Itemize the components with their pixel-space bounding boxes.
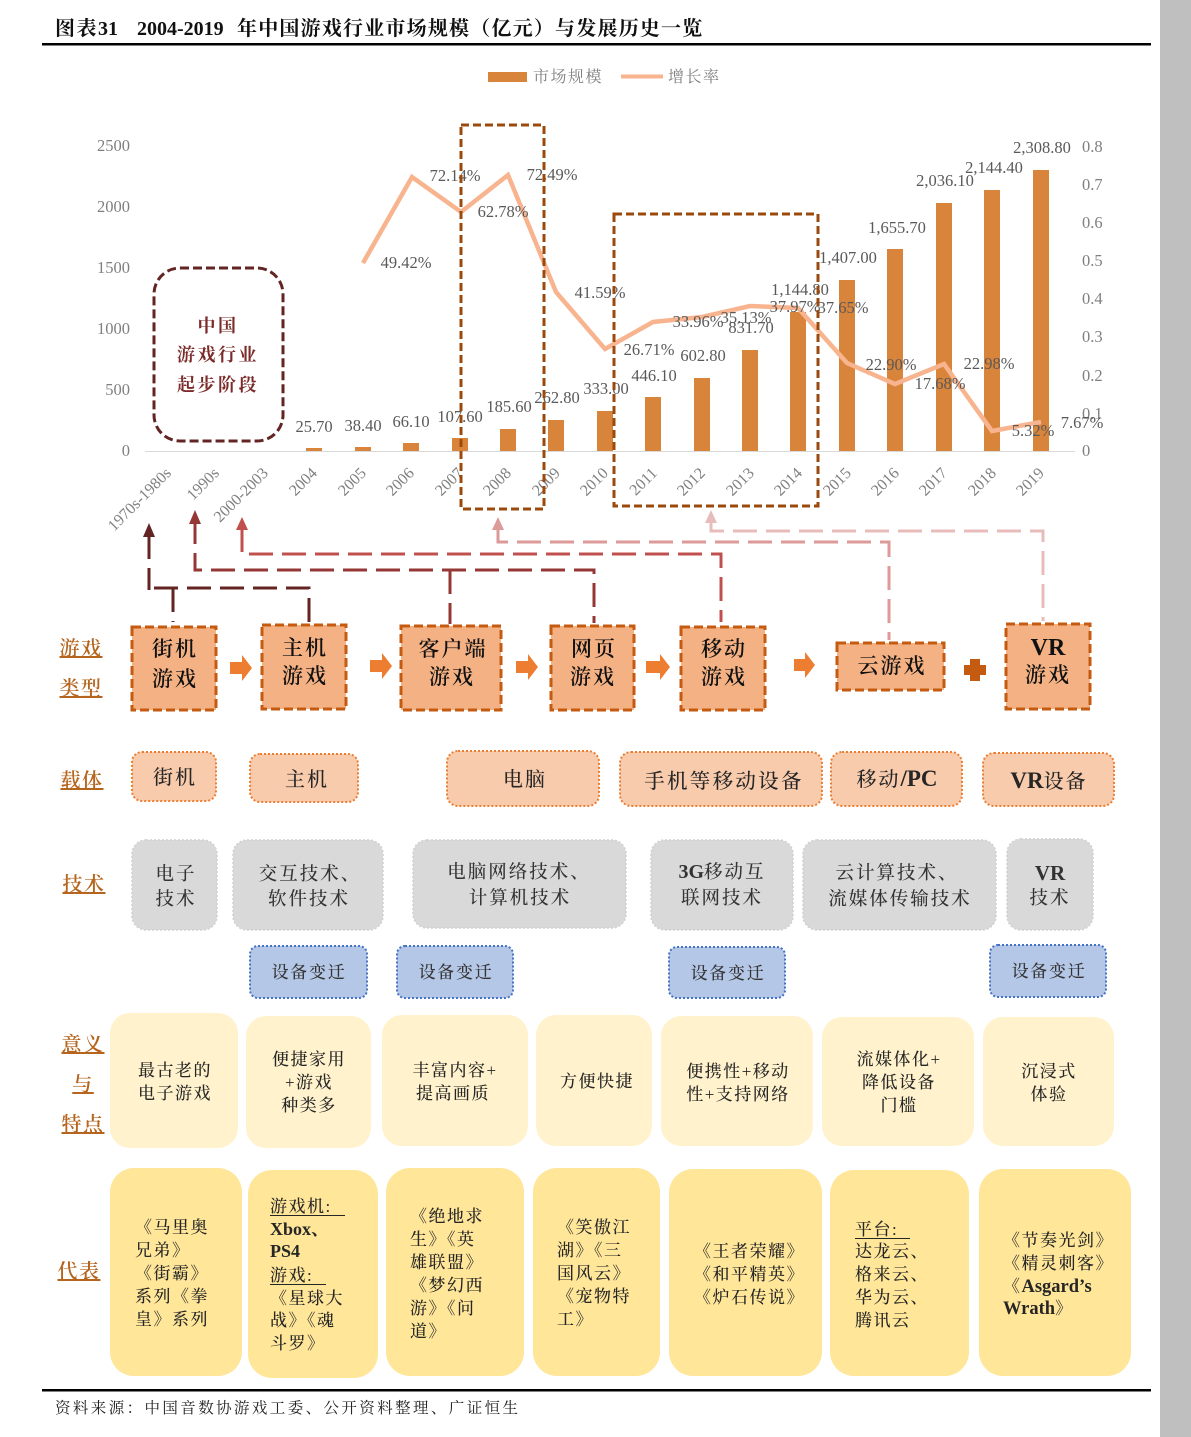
device change tag 4: 设备变迁 (1012, 962, 1086, 981)
line chart: growth rate (363, 175, 1041, 431)
highlight box: 2008 (461, 125, 544, 509)
representatives: VR: Wrath》 (1003, 1299, 1074, 1319)
representatives: web: 国风云》 (557, 1264, 631, 1283)
left y axis: 2500 (97, 136, 130, 155)
row label: meaning and features: 特点 (62, 1113, 104, 1136)
arrow (794, 652, 815, 678)
market size data labels: 333.00 (583, 379, 629, 398)
representatives: console: 战》《魂 (270, 1311, 336, 1330)
left y axis: 2000 (97, 197, 130, 216)
growth rate data labels: 35.13% (721, 308, 772, 327)
tech: 3G mobile internet: 联网技术 (681, 888, 763, 909)
representatives: console: 游戏: (270, 1266, 313, 1285)
growth rate data labels: 72.49% (527, 165, 578, 184)
bottom rule (42, 1389, 1151, 1392)
device change tag 1 (250, 946, 367, 998)
feature: convenient: 方便快捷 (560, 1072, 634, 1091)
x axis year labels: 2011 (627, 465, 661, 499)
callout: early stage: 起步阶段 (177, 374, 259, 395)
representatives: web (533, 1168, 660, 1376)
tech: electronic: 电子 (155, 864, 197, 885)
device change tag 3: 设备变迁 (691, 964, 765, 983)
type box: cloud: 云游戏 (858, 654, 926, 678)
carrier: mobile/PC: 移动/PC (856, 766, 938, 791)
carrier: mobile devices: 手机等移动设备 (644, 770, 804, 793)
representatives: web: 《笑傲江 (557, 1218, 631, 1237)
type box: arcade (132, 627, 216, 710)
right y axis: 0.3 (1082, 327, 1103, 346)
feature: home convenience: 种类多 (281, 1096, 337, 1115)
representatives: arcade (110, 1168, 242, 1376)
x axis year labels: 2016 (868, 465, 903, 499)
x axis year labels: 2004 (286, 465, 321, 499)
x axis year labels: 2007 (432, 465, 467, 499)
tech: VR (1007, 839, 1093, 930)
x axis year labels (105, 465, 1048, 535)
growth rate data labels: 41.59% (575, 283, 626, 302)
source note: 资料来源：中国音数协游戏工委、公开资料整理、广证恒生 (55, 1398, 520, 1417)
device change tag 2: 设备变迁 (419, 963, 493, 982)
tech: PC network: 计算机技术 (469, 888, 571, 909)
x axis year labels: 2005 (335, 465, 370, 499)
feature: rich content (382, 1015, 528, 1146)
legend: 增长率 (668, 68, 721, 86)
growth rate data labels: 22.90% (866, 355, 917, 374)
representatives: console: Xbox、 (270, 1219, 329, 1239)
left y axis: 0 (122, 441, 130, 460)
representatives: console: 斗罗》 (270, 1334, 326, 1353)
baseline (145, 451, 1075, 452)
left y axis: 1000 (97, 319, 130, 338)
representatives: VR: 《Asgard’s (1003, 1277, 1092, 1297)
carrier: VR devices (983, 753, 1114, 806)
representatives: client: 生》《英 (410, 1230, 476, 1249)
right grey margin band (1160, 0, 1191, 1437)
representatives: client: 道》 (410, 1322, 447, 1341)
x axis year labels: 2014 (771, 465, 806, 499)
carrier: PC: 电脑 (503, 768, 547, 791)
carrier: mobile/PC (831, 752, 962, 806)
type box: cloud (837, 643, 944, 690)
x axis year labels: 2019 (1013, 465, 1048, 499)
representatives: mobile (669, 1169, 822, 1376)
carrier: arcade: 街机 (153, 766, 197, 789)
representatives: VR: 《精灵刺客》 (1003, 1254, 1114, 1273)
representatives: mobile: 《和平精英》 (694, 1265, 805, 1284)
representatives: arcade: 《街霸》 (135, 1264, 209, 1283)
tech: cloud, streaming (803, 840, 996, 930)
growth rate data labels: 37.97% (770, 297, 821, 316)
representatives: cloud: 华为云、 (855, 1288, 929, 1307)
x axis year labels: 2000-2003 (211, 465, 272, 526)
market size data labels: 2,308.80 (1013, 138, 1071, 157)
left y axis: 1500 (97, 258, 130, 277)
feature: rich content: 提高画质 (416, 1084, 490, 1103)
device change tag 3 (669, 947, 785, 998)
feature: streaming (822, 1017, 974, 1146)
growth rate data labels: 22.98% (964, 354, 1015, 373)
representatives: arcade: 兄弟》 (135, 1241, 190, 1260)
title: 图表31 (55, 16, 118, 40)
feature: oldest: 电子游戏 (138, 1084, 212, 1103)
row label: meaning and features (62, 1033, 104, 1136)
type box: arcade: 游戏 (152, 667, 198, 691)
feature: home convenience (246, 1016, 371, 1148)
arrow (230, 655, 252, 681)
feature: oldest (110, 1013, 238, 1148)
type box: console: 主机 (282, 636, 328, 660)
legend: 市场规模 (533, 67, 603, 86)
device change tag 4 (990, 945, 1106, 997)
type box: client: 游戏 (429, 665, 475, 689)
market size data labels: 831.70 (728, 318, 774, 337)
bar chart: market size (306, 170, 1049, 451)
tech: VR: 技术 (1029, 888, 1071, 909)
type box: mobile: 移动 (701, 637, 747, 661)
tech: electronic (132, 840, 217, 930)
row label: game type: 游戏 (60, 637, 102, 660)
tech: PC network (413, 840, 626, 928)
representatives: cloud: 达龙云、 (855, 1242, 929, 1261)
callout: early stage: 游戏行业 (177, 345, 259, 365)
row label: technology: 技术 (62, 873, 106, 896)
connector: arcade and console to 1970s (143, 523, 309, 622)
feature: immersive: 体验 (1030, 1085, 1068, 1104)
feature: portability (661, 1016, 813, 1146)
market size data labels: 1,144.80 (771, 280, 829, 299)
representatives: cloud (830, 1170, 969, 1376)
connector: client and web to 1990s (189, 510, 594, 624)
representatives: VR: 《节奏光剑》 (1003, 1231, 1114, 1250)
representatives: cloud: 腾讯云 (855, 1311, 910, 1330)
device change tag 1: 设备变迁 (272, 963, 346, 982)
representatives: mobile: 《炉石传说》 (694, 1288, 805, 1307)
title: 2004-2019 (137, 18, 224, 40)
x axis year labels: 2013 (723, 465, 758, 499)
right y axis: 0.4 (1082, 289, 1103, 308)
growth rate data labels (381, 165, 1104, 440)
type box: VR: 游戏 (1025, 663, 1071, 687)
right y axis: 0.5 (1082, 251, 1103, 270)
market size data labels: 2,036.10 (916, 171, 974, 190)
carrier: arcade (132, 752, 216, 801)
representatives: client: 游》《问 (410, 1299, 476, 1318)
right y axis: 0.1 (1082, 404, 1103, 423)
representatives: web: 《宠物特 (557, 1287, 631, 1306)
tech: interactive, software (233, 840, 383, 930)
x axis year labels: 2017 (916, 465, 951, 499)
row label: carrier: 载体 (60, 769, 104, 792)
type box: VR: VR (1031, 635, 1066, 661)
representatives: console: 《星球大 (270, 1289, 344, 1308)
row label: game type: 类型 (60, 677, 102, 700)
growth rate data labels: 33.96% (673, 312, 724, 331)
tech: VR: VR (1035, 861, 1066, 885)
row label: meaning and features: 意义 (62, 1033, 104, 1056)
growth rate data labels: 37.65% (818, 298, 869, 317)
row label: representatives: 代表 (58, 1259, 100, 1283)
feature: streaming: 降低设备 (862, 1073, 936, 1092)
type box: console (262, 625, 346, 709)
arrow (646, 654, 670, 680)
carrier: mobile devices (620, 752, 822, 806)
callout: early stage: 中国 (198, 316, 238, 336)
feature: portability: 便携性+移动 (686, 1062, 790, 1081)
type box: client (401, 626, 501, 710)
callout: early stage (154, 268, 283, 441)
representatives: client: 雄联盟》 (410, 1253, 484, 1272)
left y axis: 500 (105, 380, 130, 399)
representatives: client: 《绝地求 (410, 1207, 484, 1226)
market size data labels: 185.60 (486, 397, 532, 416)
market size data labels: 107.60 (437, 407, 483, 426)
feature: convenient (536, 1015, 652, 1146)
feature: streaming: 流媒体化+ (856, 1050, 942, 1069)
feature: immersive: 沉浸式 (1021, 1062, 1077, 1081)
market size data labels: 1,655.70 (868, 218, 926, 237)
representatives: web: 湖》《三 (557, 1241, 622, 1260)
row label: meaning and features: 与 (72, 1073, 94, 1096)
x axis year labels: 2009 (529, 465, 564, 499)
x axis year labels: 2012 (674, 465, 709, 499)
market size data labels (295, 138, 1071, 436)
connector: mobile to 2000-2003 (236, 517, 721, 622)
x axis year labels: 2006 (383, 465, 418, 499)
representatives: arcade: 系列《拳 (135, 1287, 209, 1306)
highlight box: 2011-2014 (614, 214, 818, 506)
tech: cloud, streaming: 流媒体传输技术 (828, 889, 972, 910)
tech: cloud, streaming: 云计算技术、 (835, 863, 959, 884)
type box: web: 游戏 (570, 665, 616, 689)
representatives: arcade: 皇》系列 (135, 1310, 209, 1329)
carrier: PC (447, 751, 599, 806)
market size data labels: 2,144.40 (965, 158, 1023, 177)
device change tag 2 (397, 946, 513, 998)
representatives: client: 《梦幻西 (410, 1276, 484, 1295)
type box: web (551, 626, 634, 710)
type box: arcade: 街机 (152, 637, 198, 661)
representatives: cloud: 平台: (855, 1220, 898, 1239)
tech: 3G mobile internet (651, 840, 793, 930)
feature: oldest: 最古老的 (138, 1061, 212, 1080)
market size data labels: 66.10 (392, 412, 430, 431)
carrier: console (250, 754, 358, 802)
growth rate data labels: 7.67% (1061, 413, 1104, 432)
x axis year labels: 1990s (184, 465, 223, 504)
tech: electronic: 技术 (155, 889, 197, 910)
tech: PC network: 电脑网络技术、 (447, 862, 591, 883)
x axis year labels: 2015 (820, 465, 855, 499)
icon: plus (964, 659, 986, 681)
representatives: console (248, 1170, 378, 1378)
type box: mobile: 游戏 (701, 665, 747, 689)
market size data labels: 602.80 (680, 346, 726, 365)
feature: home convenience: +游戏 (285, 1073, 333, 1092)
right y axis: 0.7 (1082, 175, 1103, 194)
representatives: arcade: 《马里奥 (135, 1218, 209, 1237)
feature: home convenience: 便捷家用 (272, 1050, 346, 1069)
growth rate data labels: 62.78% (478, 202, 529, 221)
x axis year labels: 2010 (577, 465, 612, 499)
representatives: client (386, 1168, 524, 1376)
title: 年中国游戏行业市场规模（亿元）与发展历史一览 (237, 16, 703, 40)
representatives: console: PS4 (270, 1241, 300, 1261)
x axis year labels: 1970s-1980s (105, 465, 175, 535)
type box: VR (1006, 624, 1090, 709)
right y axis: 0 (1082, 441, 1090, 460)
representatives: mobile: 《王者荣耀》 (694, 1242, 805, 1261)
type box: web: 网页 (571, 637, 617, 661)
left y axis (97, 136, 130, 460)
carrier: console: 主机 (285, 768, 329, 791)
legend (488, 67, 721, 86)
right y axis (1082, 137, 1103, 460)
growth rate data labels: 72.14% (430, 166, 481, 185)
market size data labels: 1,407.00 (819, 248, 877, 267)
growth rate data labels: 5.32% (1012, 421, 1055, 440)
carrier: VR devices: VR设备 (1010, 768, 1088, 793)
arrow (370, 653, 392, 679)
tech: 3G mobile internet: 3G移动互 (678, 861, 766, 883)
representatives: VR (979, 1169, 1131, 1376)
x axis year labels: 2008 (480, 465, 515, 499)
row label: game type (60, 637, 102, 700)
arrow (516, 654, 538, 680)
feature: rich content: 丰富内容+ (412, 1061, 498, 1080)
market size data labels: 446.10 (631, 366, 677, 385)
market size data labels: 262.80 (534, 388, 580, 407)
representatives: console: 游戏机: (270, 1197, 332, 1216)
right y axis: 0.2 (1082, 366, 1103, 385)
tech: interactive, software: 软件技术 (268, 889, 350, 910)
feature: immersive (983, 1017, 1114, 1146)
market size data labels: 25.70 (295, 417, 333, 436)
market size data labels: 38.40 (344, 416, 382, 435)
right y axis: 0.6 (1082, 213, 1103, 232)
growth rate data labels: 26.71% (624, 340, 675, 359)
type box: client: 客户端 (418, 637, 488, 661)
connector: cloud to 2008 (492, 517, 889, 640)
title (42, 16, 1151, 46)
type box: mobile (681, 627, 765, 710)
x axis year labels: 2018 (965, 465, 1000, 499)
feature: streaming: 门槛 (880, 1095, 918, 1115)
feature: portability: 性+支持网络 (686, 1085, 790, 1104)
representatives: web: 工》 (557, 1310, 594, 1329)
growth rate data labels: 17.68% (915, 374, 966, 393)
tech: interactive, software: 交互技术、 (259, 864, 361, 885)
type box: console: 游戏 (282, 664, 328, 688)
growth rate data labels: 49.42% (381, 253, 432, 272)
connector: VR to 2011-2014 (705, 510, 1043, 621)
right y axis: 0.8 (1082, 137, 1103, 156)
representatives: cloud: 格来云、 (855, 1265, 929, 1284)
